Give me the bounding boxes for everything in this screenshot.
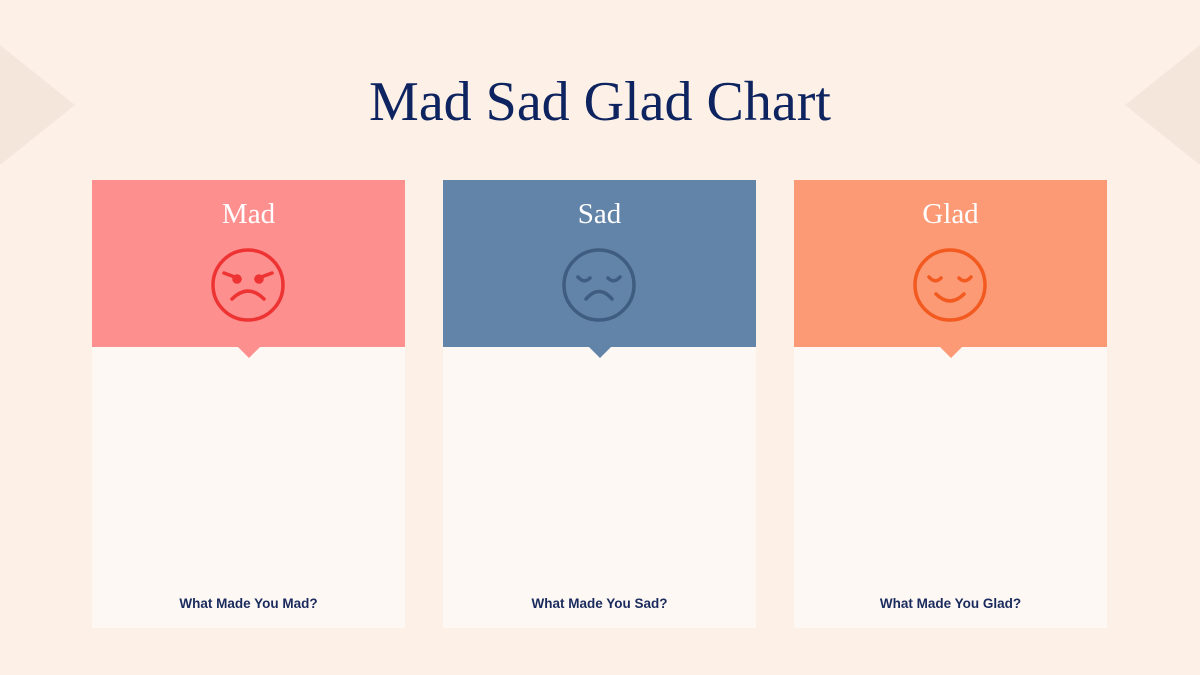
title: Mad Sad Glad Chart xyxy=(369,71,831,133)
header: sad xyxy=(443,180,756,347)
icon: sad face xyxy=(562,248,636,322)
decorative triangles xyxy=(0,46,1200,164)
header: mad: Mad xyxy=(222,198,275,230)
panel: glad xyxy=(794,180,1107,628)
header: sad: Sad xyxy=(578,198,621,230)
label: What Made You Sad? xyxy=(531,596,668,611)
label: What Made You Mad? xyxy=(179,596,318,611)
icon: angry face xyxy=(211,248,285,322)
label: What Made You Glad? xyxy=(880,596,1021,611)
panel: sad xyxy=(443,180,756,628)
header: glad xyxy=(794,180,1107,347)
header: glad: Glad xyxy=(922,198,979,230)
icon: happy face xyxy=(913,248,987,322)
header: mad xyxy=(92,180,405,347)
panel: mad xyxy=(92,180,405,628)
